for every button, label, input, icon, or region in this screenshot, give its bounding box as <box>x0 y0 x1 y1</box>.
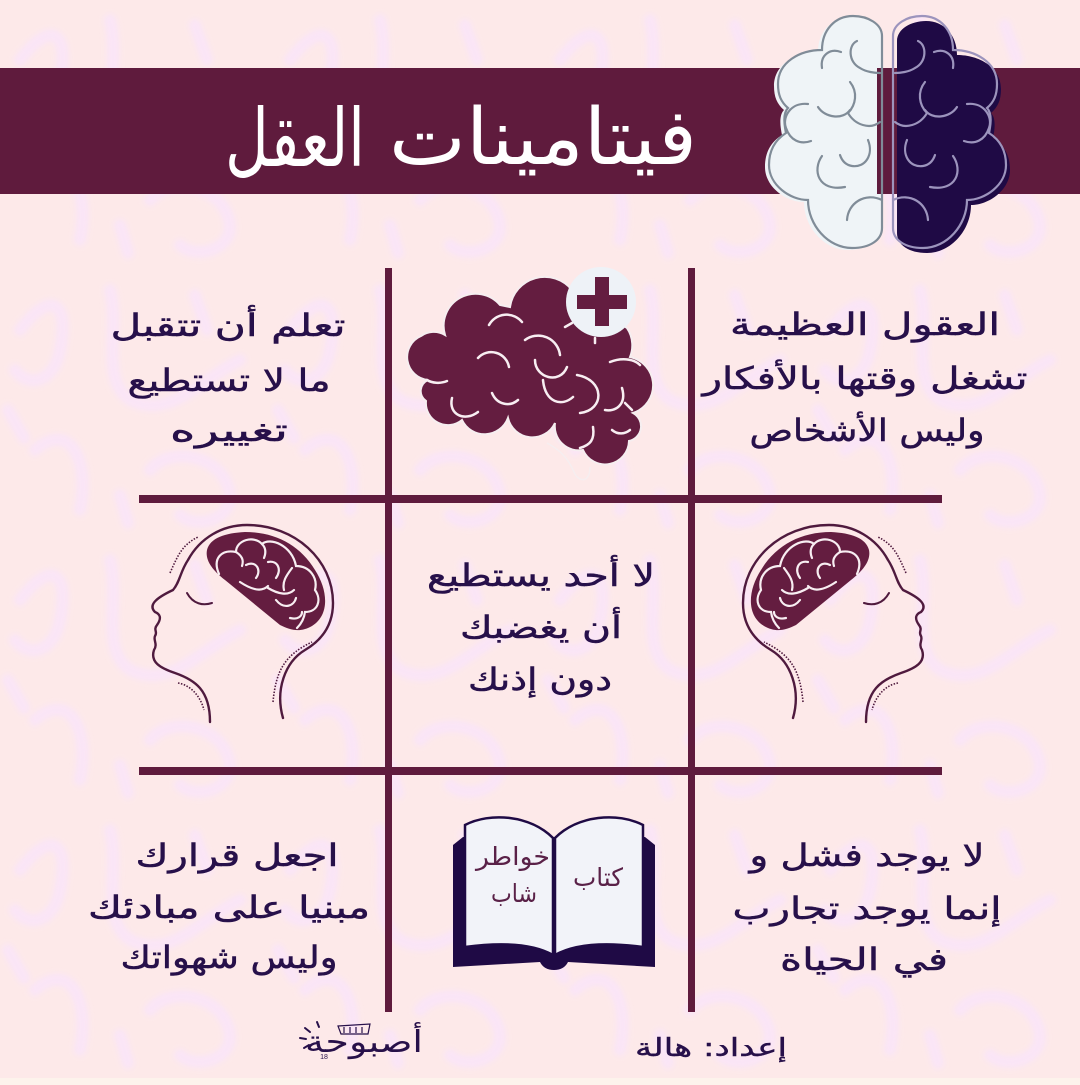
text: bottom right cell: في الحياة <box>780 942 948 978</box>
text: center cell <box>427 555 655 698</box>
text: top right cell: العقول العظيمة <box>730 307 1000 343</box>
icon: open book: خواطر <box>474 842 550 871</box>
icon: open book <box>453 817 655 970</box>
text: top left cell: ما لا تستطيع <box>128 363 330 399</box>
footer credit: إعداد: هالة <box>635 1033 787 1063</box>
text: bottom left cell <box>88 838 370 976</box>
title: فيتامينات <box>389 93 697 183</box>
text: center cell: أن يغضبك <box>460 607 622 646</box>
icon: head with brain, left <box>152 525 333 722</box>
title: العقل <box>225 92 365 185</box>
grid lines <box>139 268 942 1012</box>
text: top left cell <box>110 305 346 449</box>
title band <box>0 68 1080 194</box>
text: bottom left cell: وليس شهواتك <box>120 940 338 976</box>
text: top right cell: تشغل وقتها بالأفكار <box>700 359 1028 397</box>
icon: open book: كتاب <box>573 863 623 892</box>
text: bottom right cell: لا يوجد فشل و <box>747 838 984 874</box>
icon: two-tone brain <box>765 16 1010 253</box>
text: bottom left cell: مبنيا على مبادئك <box>88 890 370 926</box>
icon: head with brain, right <box>743 525 924 722</box>
text: top left cell: تعلم أن تتقبل <box>110 305 346 344</box>
text: center cell: دون إذنك <box>468 662 612 698</box>
logo: أصبوحة <box>305 1021 423 1060</box>
text: bottom right cell <box>732 838 1002 978</box>
logo: 18 <box>320 1054 328 1061</box>
text: top right cell: وليس الأشخاص <box>750 411 984 449</box>
text: top right cell <box>700 307 1028 449</box>
icon: open book: شاب <box>491 879 537 908</box>
logo <box>300 1021 423 1061</box>
text: top left cell: تغييره <box>170 413 288 449</box>
text: bottom left cell: اجعل قرارك <box>136 838 338 874</box>
text: center cell: لا أحد يستطيع <box>427 555 655 594</box>
icon: brain with plus <box>407 267 653 480</box>
title <box>225 92 697 185</box>
text: bottom right cell: إنما يوجد تجارب <box>732 891 1002 927</box>
